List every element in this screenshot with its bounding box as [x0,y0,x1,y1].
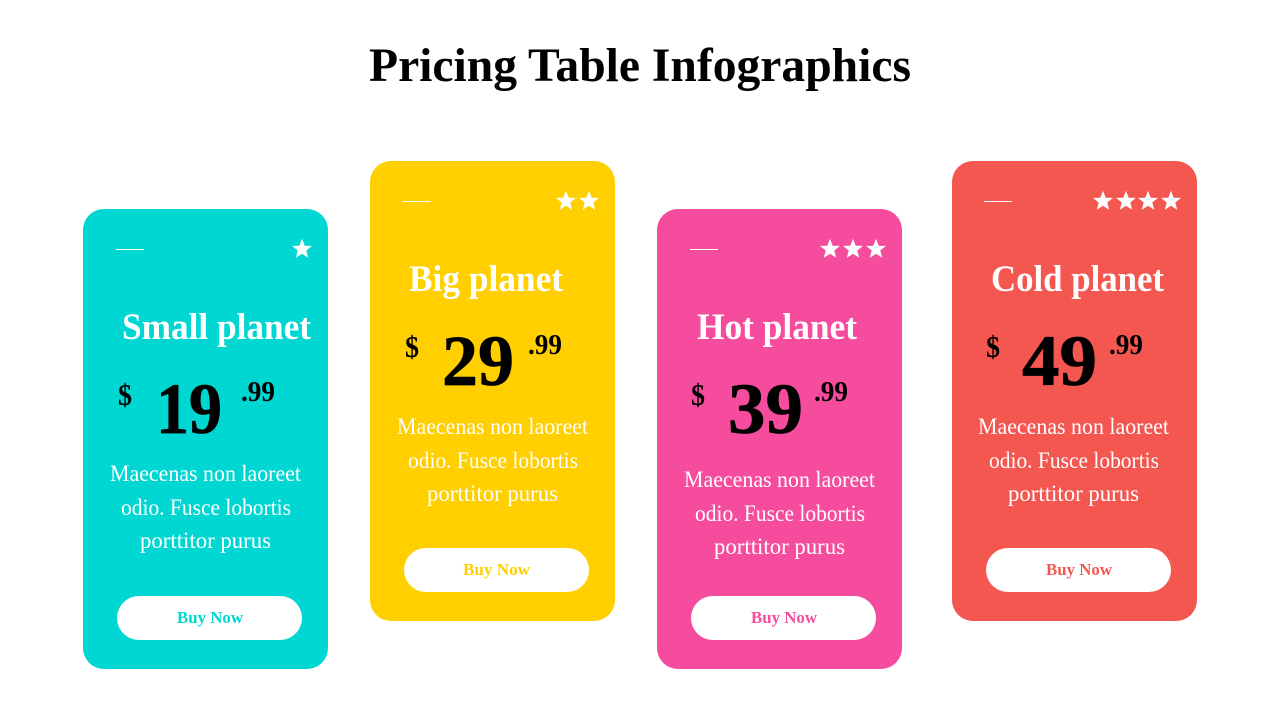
title: Pricing Table Infographics [369,39,911,92]
price: 19 [156,369,222,449]
panel: Big planet [370,161,615,621]
panel: Cold planet [952,161,1197,621]
description: porttitor purus [140,528,271,553]
price: $ [405,329,419,364]
button: Buy Now [404,548,589,592]
button: Buy Now: Buy Now [1046,560,1113,579]
price: 39 [728,369,803,449]
rating stars: 4 [1093,191,1181,210]
panel: Hot planet [657,209,902,669]
description: Maecenas non laoreet [684,467,876,492]
plan name: Cold planet [991,259,1165,300]
price: $ [118,377,132,412]
price: $ [986,329,1000,364]
description: odio. Fusce lobortis [121,495,291,520]
description [684,467,876,559]
price [691,369,848,449]
button: Buy Now: Buy Now [751,608,818,627]
button: Buy Now [117,596,302,640]
description [397,414,589,506]
price: .99 [1109,330,1143,361]
description: porttitor purus [427,481,558,506]
price: 49 [1022,321,1097,401]
description: Maecenas non laoreet [397,414,589,439]
price: .99 [814,377,848,408]
button: Buy Now: Buy Now [177,608,244,627]
price [986,321,1143,401]
plan name: Big planet [409,259,564,300]
button: Buy Now: Buy Now [463,560,531,579]
description: odio. Fusce lobortis [989,448,1159,473]
panel: Small planet [83,209,328,669]
description: Maecenas non laoreet [978,414,1170,439]
description: Maecenas non laoreet [110,461,302,486]
price: $ [691,377,705,412]
price: .99 [241,377,275,408]
button: Buy Now [986,548,1171,592]
rating stars: 1 [292,239,312,258]
plan name: Small planet [122,307,312,348]
plan name: Hot planet [697,307,858,348]
price [118,369,275,449]
price: 29 [442,321,514,401]
description [110,461,302,553]
rating stars: 3 [820,239,886,258]
description: odio. Fusce lobortis [695,501,865,526]
price: .99 [528,330,562,361]
description: porttitor purus [1008,481,1139,506]
description: odio. Fusce lobortis [408,448,578,473]
description [978,414,1170,506]
button: Buy Now [691,596,876,640]
rating stars: 2 [556,191,599,210]
description: porttitor purus [714,534,845,559]
price [405,321,562,401]
